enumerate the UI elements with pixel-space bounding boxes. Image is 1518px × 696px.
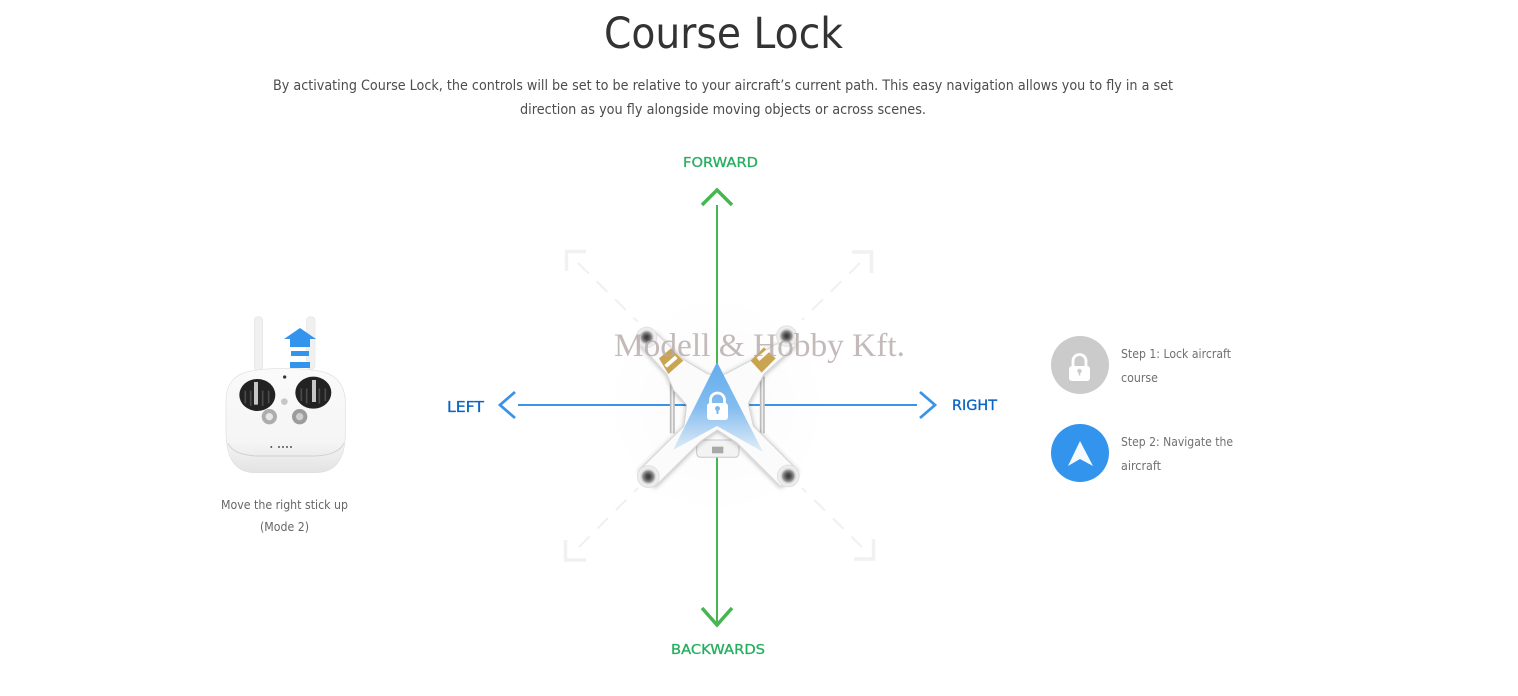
- drone glow: [592, 280, 842, 530]
- forward backward axis: [702, 190, 732, 625]
- direction label: right: RIGHT: [952, 398, 997, 414]
- focus frame corners and diagonals: [566, 252, 874, 560]
- step 1 icon: lock: [1051, 336, 1109, 394]
- direction label: left: LEFT: [447, 398, 485, 416]
- remote caption: Move the right stick up: [221, 498, 348, 512]
- drone illustration: [636, 325, 800, 488]
- step 2 text: [1121, 435, 1233, 473]
- step 2 icon: navigation arrow: [1051, 424, 1109, 482]
- icon: stick up arrow: [284, 328, 316, 368]
- step 2 text: Step 2: Navigate the: [1121, 435, 1233, 449]
- direction label: forward: FORWARD: [683, 155, 758, 171]
- remote caption: (Mode 2): [260, 520, 309, 534]
- intro paragraph: [273, 78, 1173, 118]
- watermark: Modell & Hobby Kft.: [614, 328, 905, 364]
- remote controller illustration: [226, 317, 345, 473]
- step 2 text: aircraft: [1121, 459, 1161, 473]
- direction label: backwards: BACKWARDS: [671, 642, 765, 658]
- intro paragraph: direction as you fly alongside moving objects or across scenes.: [520, 102, 926, 118]
- step 1 text: Step 1: Lock aircraft: [1121, 347, 1231, 361]
- intro paragraph: By activating Course Lock, the controls will be set to be relative to your aircraft’s current path. This easy navigation allows you to fly in a set: [273, 78, 1173, 94]
- remote caption: [221, 498, 348, 534]
- course lock triangle with padlock: [673, 362, 763, 452]
- left right axis: [500, 392, 935, 418]
- title: Course Lock: [604, 9, 843, 59]
- step 1 text: [1121, 347, 1231, 385]
- step 1 text: course: [1121, 371, 1158, 385]
